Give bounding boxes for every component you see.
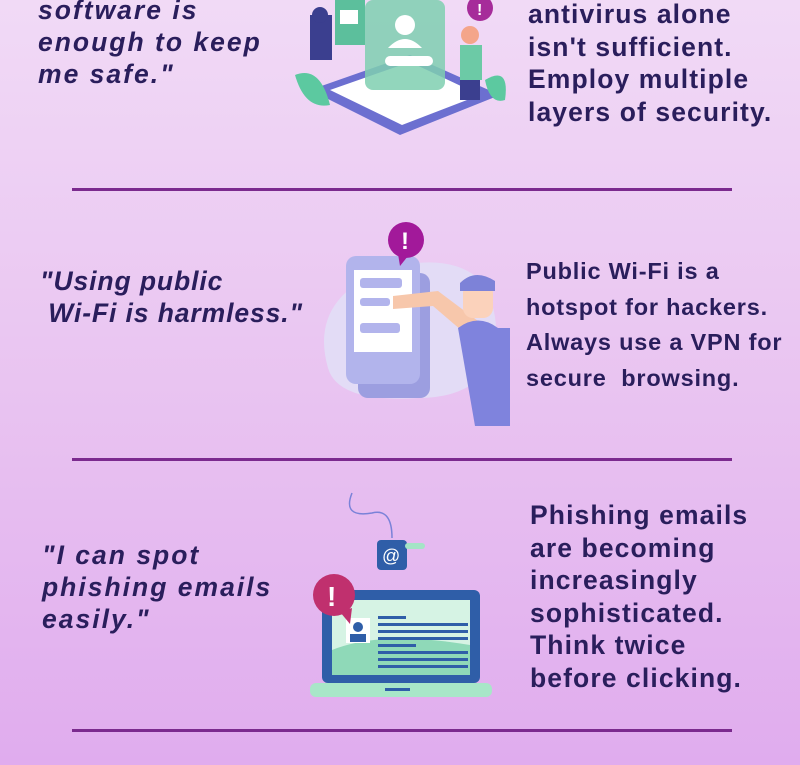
fact 2 text	[526, 258, 782, 391]
fact 1 text: Employ multiple	[528, 64, 749, 94]
fact 2 text: secure browsing.	[526, 364, 739, 390]
myth 3 text: easily."	[42, 604, 151, 634]
illustration: public wifi phone	[324, 222, 510, 426]
fact 3 text: Phishing emails	[530, 500, 748, 530]
fact 3 text: increasingly	[530, 565, 698, 595]
fact 2 text: Public Wi-Fi is a	[526, 258, 720, 284]
myth 3 text: "I can spot	[42, 540, 200, 570]
fact 1 text: isn't sufficient.	[528, 32, 733, 62]
fact 3 text: sophisticated.	[530, 598, 724, 628]
illustration: phishing laptop: !	[327, 581, 336, 612]
fact 1 text	[528, 0, 772, 126]
fact 3 text	[530, 500, 748, 692]
illustration: phishing laptop	[310, 492, 492, 697]
illustration: phishing login on phone: !	[477, 2, 482, 19]
fact 2 text: Always use a VPN for	[526, 329, 782, 355]
fact 1 text: layers of security.	[528, 96, 772, 126]
myth 3 text: phishing emails	[42, 572, 272, 602]
fact 3 text: before clicking.	[530, 662, 742, 692]
myth 2 text	[40, 266, 303, 328]
illustration: phishing login on phone	[295, 0, 506, 135]
myth 1 text: enough to keep	[38, 27, 262, 57]
myth 1 text: me safe."	[38, 59, 175, 89]
myth 1 text	[38, 0, 262, 89]
fact 3 text: Think twice	[530, 630, 686, 660]
fact 2 text: hotspot for hackers.	[526, 294, 768, 320]
illustration: phishing laptop: @	[382, 546, 400, 566]
illustration: public wifi phone: !	[401, 228, 409, 255]
myth 2 text: "Using public	[40, 266, 223, 296]
myth 2 text: Wi-Fi is harmless."	[48, 298, 303, 328]
myth 3 text	[41, 540, 272, 634]
fact 3 text: are becoming	[530, 532, 716, 562]
